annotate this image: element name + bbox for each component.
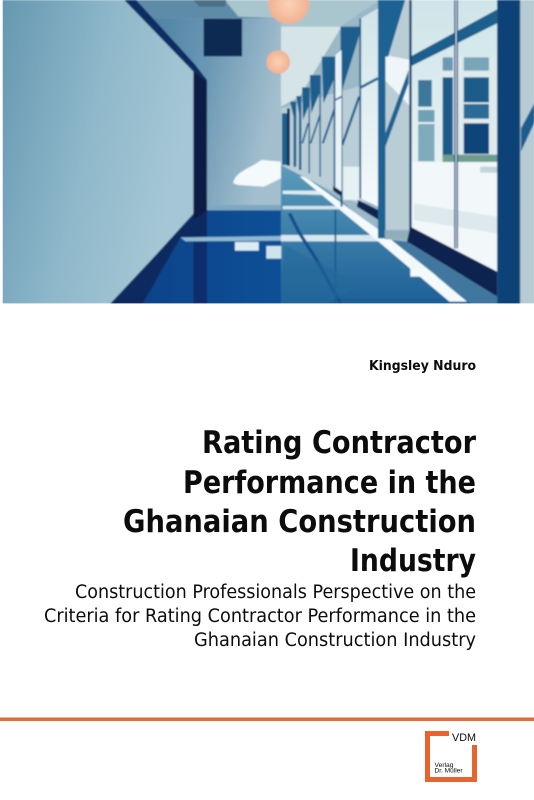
- dark wedge along wall bottom: [109, 211, 207, 305]
- floor: [142, 209, 282, 304]
- doorway reflection: [193, 241, 207, 307]
- pillar diagonal shadows: [302, 27, 359, 207]
- title: [123, 425, 477, 579]
- subtitle: Construction Professionals Perspective on the: [75, 582, 476, 603]
- publisher logo: VDM Verlag Dr. Müller: Dr. Müller: [434, 768, 462, 774]
- sunlight patch on wall: [233, 160, 281, 187]
- publisher logo: VDM Verlag Dr. Müller: [425, 731, 477, 782]
- main windows: [410, 0, 497, 277]
- cover photo: blue corridor: [0, 0, 534, 307]
- sills: [357, 200, 380, 221]
- corridor far walls: [280, 86, 367, 204]
- window frame: [410, 9, 497, 67]
- left wall: [0, 0, 193, 307]
- subtitle: Ghanaian Construction Industry: [194, 630, 476, 651]
- doorway: [193, 72, 207, 220]
- title: Industry: [350, 543, 476, 579]
- publisher logo: VDM Verlag Dr. Müller: VDM: [452, 732, 476, 744]
- title: Rating Contractor: [202, 425, 477, 461]
- distant windows: [335, 50, 342, 192]
- floor reflection and light bands: [180, 236, 283, 241]
- ceiling: [124, 0, 380, 107]
- subtitle: Criteria for Rating Contractor Performance in the: [44, 606, 476, 627]
- subtitle: [44, 582, 476, 651]
- dark panel: [204, 19, 242, 56]
- publisher logo: VDM Verlag Dr. Müller: Verlag: [434, 763, 454, 769]
- dark edge along wall top: [124, 0, 207, 88]
- title: Performance in the: [183, 465, 476, 501]
- vent: [193, 0, 226, 7]
- orange divider line: [0, 718, 534, 721]
- author name: Kingsley Nduro: [369, 359, 476, 374]
- pillars in perspective: [282, 27, 360, 187]
- floor tile strip: [392, 240, 497, 307]
- main column: [384, 0, 410, 230]
- title: Ghanaian Construction: [123, 504, 476, 540]
- back wall: [145, 18, 281, 210]
- right column: [497, 0, 520, 307]
- view: outside building: [412, 56, 498, 233]
- lamps: [268, 0, 309, 24]
